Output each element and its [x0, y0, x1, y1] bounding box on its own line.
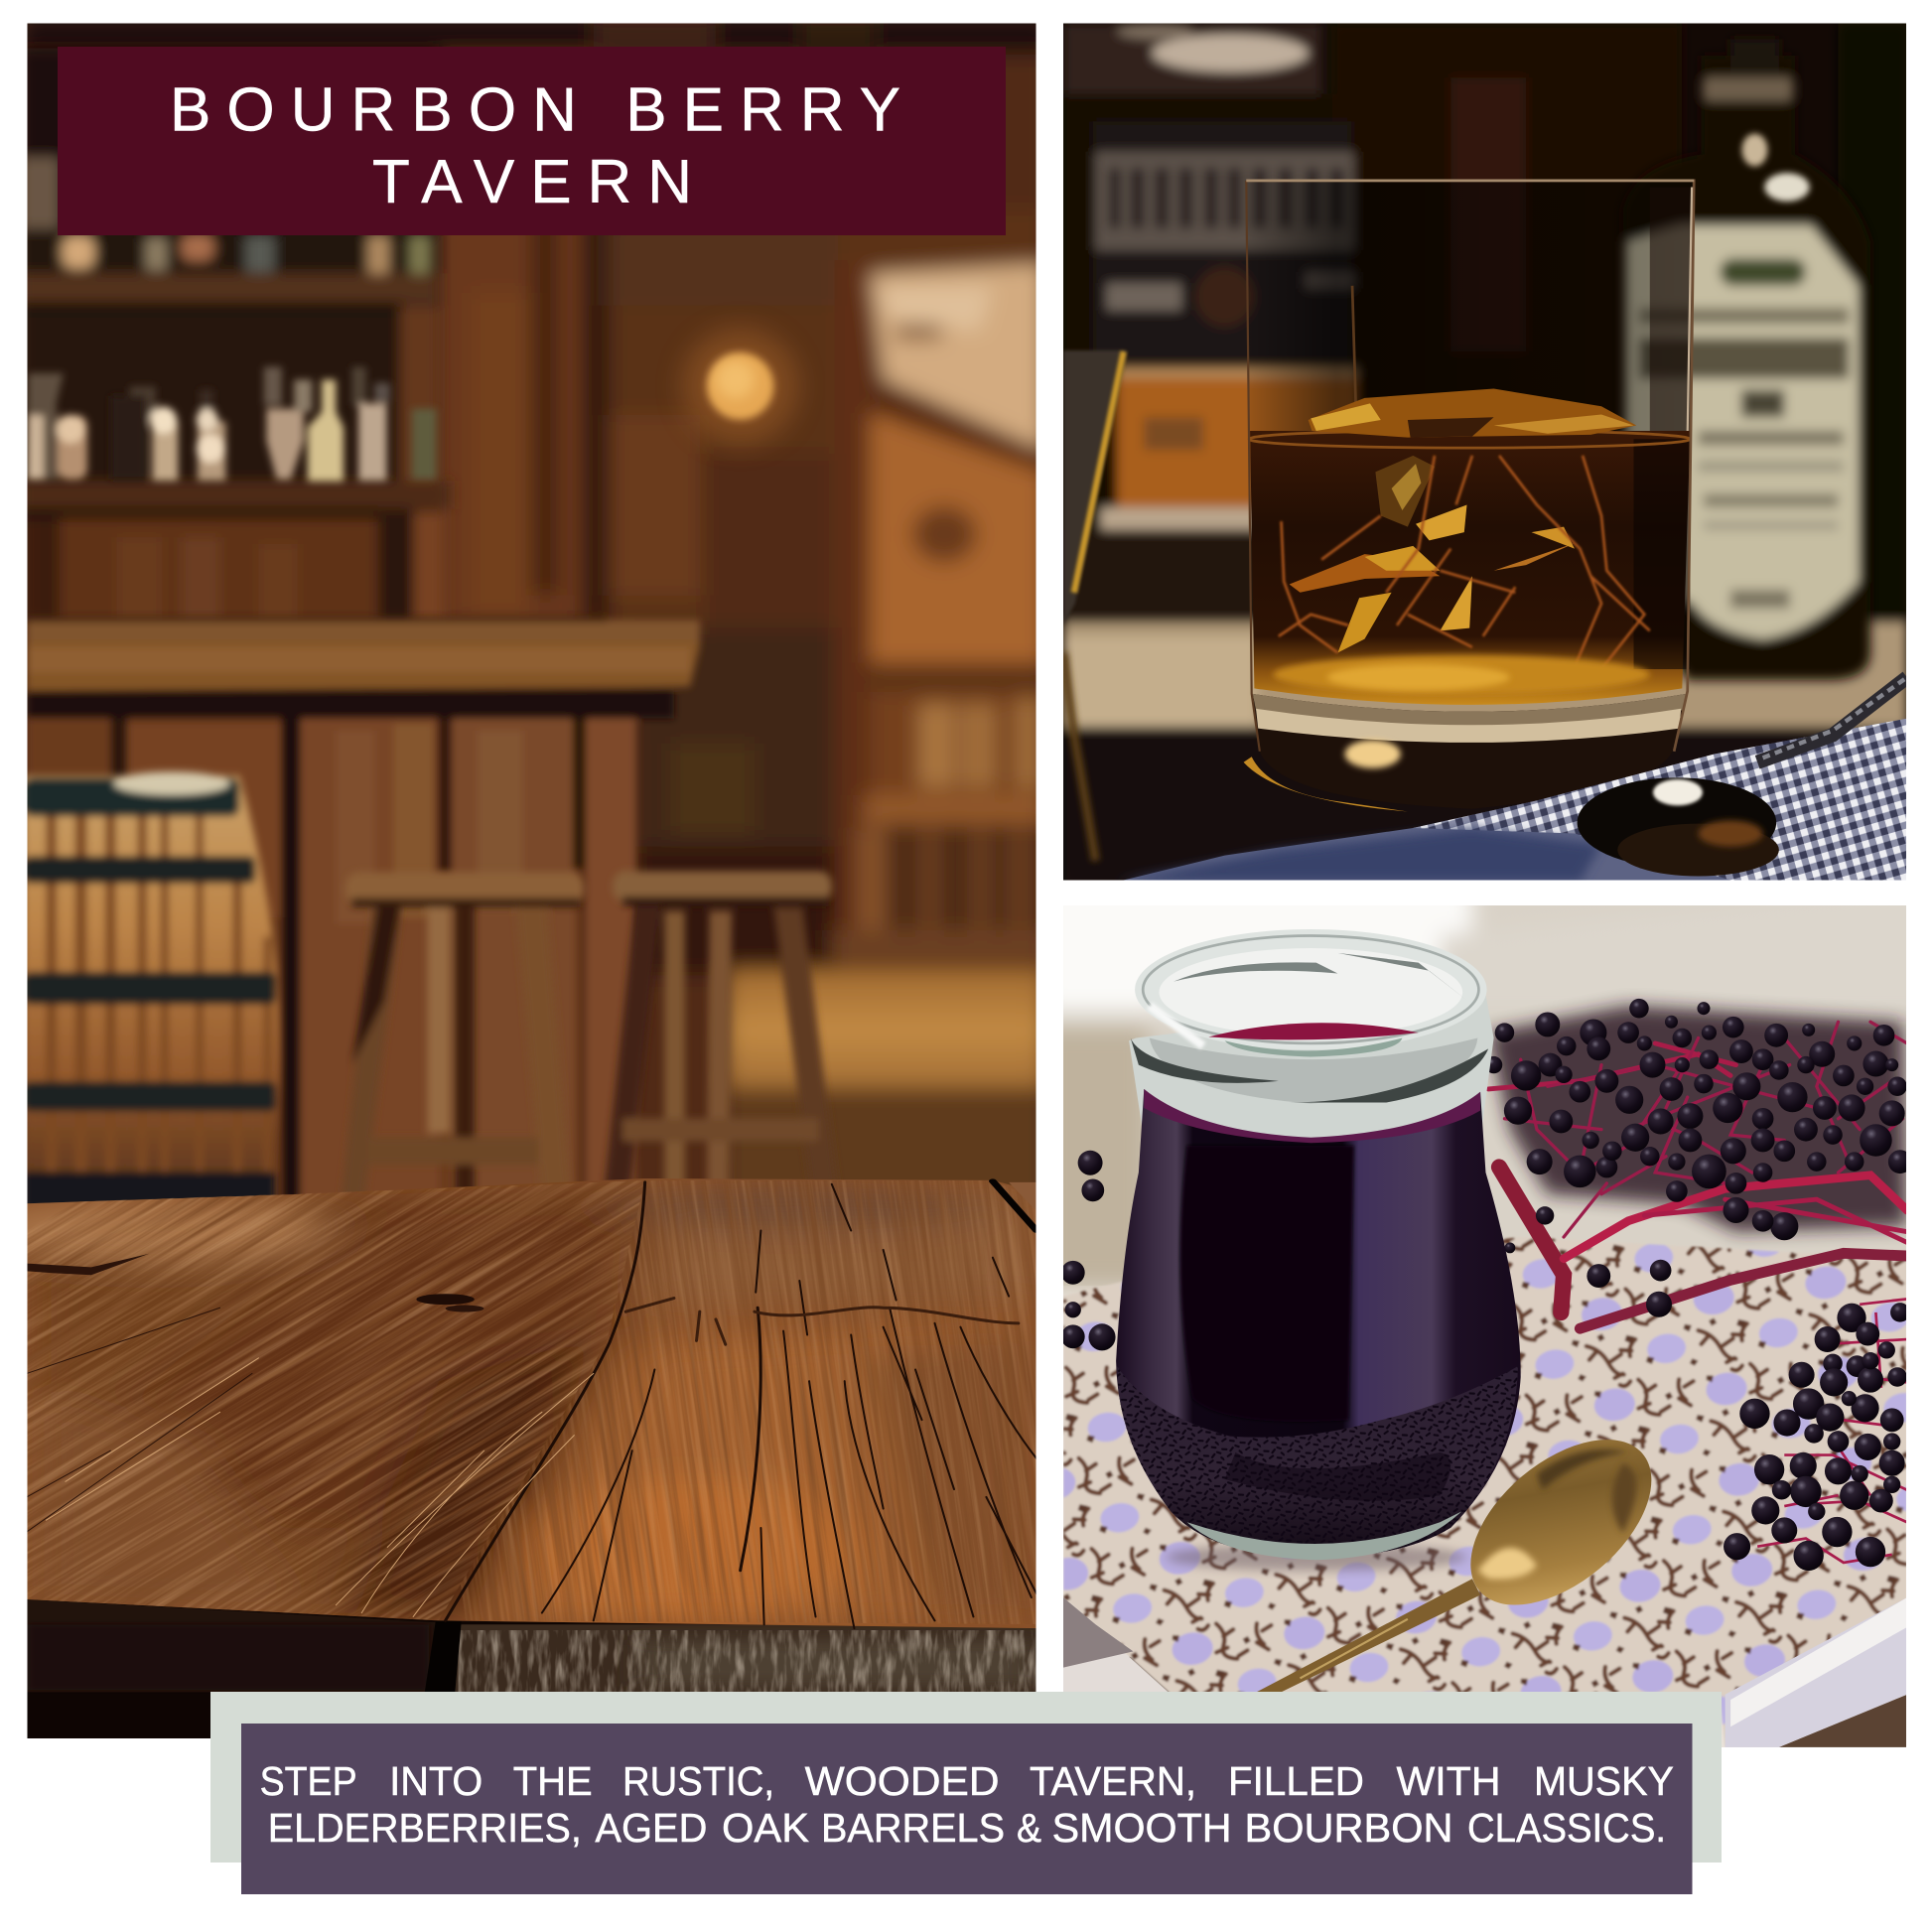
caption text: ELDERBERRIES, [268, 1805, 582, 1851]
title text: TAVERN [372, 148, 692, 216]
caption text: INTO [389, 1758, 483, 1804]
tavern interior background [21, 16, 1050, 1239]
jar dark liquid body [1116, 1089, 1521, 1558]
panel: whiskey glass photo [1063, 23, 1908, 886]
blurred backdrop [1063, 23, 1908, 886]
caption text: AGED [595, 1805, 707, 1851]
caption text: BOURBON [1245, 1805, 1453, 1851]
caption text: STEP [260, 1758, 357, 1804]
bottle [1623, 40, 1870, 680]
title banner [58, 47, 1006, 235]
bottles [26, 366, 437, 482]
lower right berry cluster [1724, 1299, 1910, 1571]
heavy glass base [1253, 694, 1687, 809]
caption text: WITH [1396, 1758, 1501, 1804]
blurred bourbon box [1093, 121, 1351, 362]
whiskey glass [1244, 181, 1694, 811]
back shelves with bottles [21, 48, 451, 621]
jam jar [1116, 929, 1521, 1571]
glass upper dark interior [1246, 181, 1694, 431]
table front edge [27, 1599, 1036, 1692]
title text: BOURBON BERRY [170, 75, 900, 145]
caption text: CLASSICS. [1467, 1805, 1666, 1851]
table cracks and knots [27, 1181, 1036, 1628]
metal jigger at left [1063, 350, 1127, 861]
dark area below table [24, 1597, 1054, 1744]
bar counter [27, 618, 700, 1210]
caption text: RUSTIC, [622, 1758, 774, 1804]
caption panel [241, 1724, 1692, 1894]
ice cubes [1279, 389, 1650, 680]
caption text: SMOOTH [1052, 1805, 1232, 1851]
stool 2 [603, 871, 840, 1202]
wooden table top [0, 797, 1164, 1932]
caption text: MUSKY [1534, 1758, 1674, 1804]
elderberry stems upper pile [1488, 1006, 1907, 1328]
checked towel and spoon [1117, 677, 1907, 882]
panel: rustic tavern photo [28, 24, 1036, 1738]
wood grain right plank [385, 950, 1164, 1830]
floral cloth [1063, 1237, 1907, 1747]
jar base shadow [1166, 1544, 1467, 1571]
caption text: THE [513, 1758, 593, 1804]
stool 1 [342, 873, 584, 1202]
mottled bottom of jar [1117, 1366, 1518, 1558]
right building [845, 216, 1035, 257]
lamp [682, 329, 798, 444]
table and backdrop [1041, 882, 1932, 1747]
caption text: & [1017, 1805, 1041, 1851]
caption text: BARRELS [821, 1805, 1005, 1851]
caption text: WOODED [805, 1758, 1000, 1804]
stray berries left [1078, 1151, 1103, 1175]
table surface tones [0, 1176, 1036, 1632]
brass spoon [1257, 1408, 1682, 1694]
caption backing panel [210, 1692, 1722, 1863]
title text [170, 75, 900, 216]
panel: elderberry syrup photo [1041, 882, 1932, 1749]
caption text [260, 1758, 1674, 1851]
barrel [24, 771, 279, 1210]
caption text: FILLED [1228, 1758, 1364, 1804]
glass outline [1246, 181, 1694, 752]
jar glass rim and neck [1129, 929, 1494, 1140]
elderberries upper pile [1061, 999, 1912, 1350]
table back [1063, 622, 1907, 732]
wood grain left plank [0, 797, 1063, 1932]
caption text: TAVERN, [1030, 1758, 1196, 1804]
caption text: OAK [722, 1805, 809, 1851]
amber pool at the base [1273, 655, 1650, 694]
bourbon liquid [1250, 431, 1690, 705]
